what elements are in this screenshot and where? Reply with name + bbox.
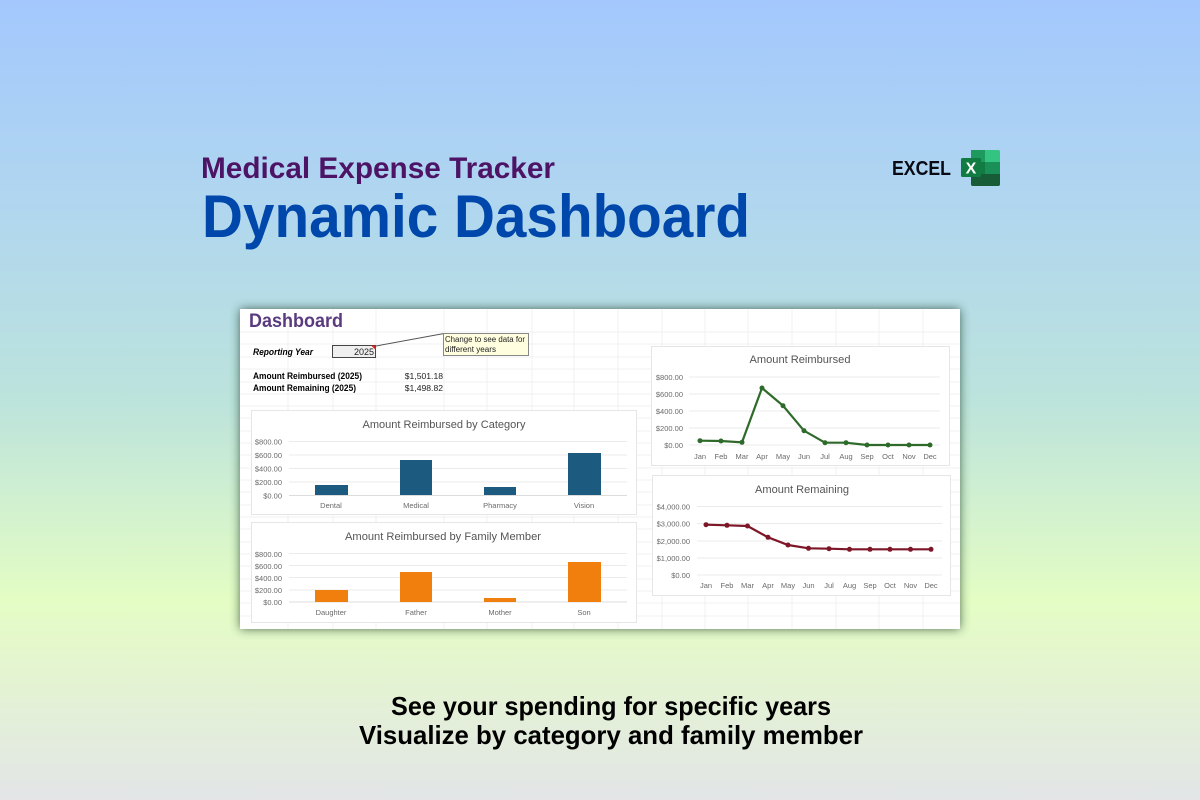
- line chart: amount reimbursed: [652, 346, 950, 466]
- bar chart: reimbursed by family member: Son: [577, 608, 591, 617]
- line chart: amount remaining: Nov: [904, 581, 917, 590]
- line chart: amount remaining: $1,000.00: [657, 554, 690, 563]
- line chart: amount remaining: Aug: [843, 581, 856, 590]
- input: reporting year cell: 2025: [354, 347, 374, 357]
- heading: Dashboard: Dashboard: [249, 311, 343, 332]
- line chart: amount remaining: Oct: [884, 581, 897, 590]
- callout: change year note: [376, 334, 528, 356]
- bar chart: reimbursed by family member: $0.00: [263, 598, 282, 607]
- callout: change year note: Change to see data for: [445, 335, 525, 344]
- line chart: amount reimbursed: Jul: [820, 452, 830, 461]
- bar chart: reimbursed by family member: $800.00: [255, 550, 282, 559]
- line chart: amount remaining: $4,000.00: [657, 502, 690, 512]
- bar chart: reimbursed by category: Medical: [403, 501, 429, 510]
- stat: amount remaining: [253, 383, 443, 393]
- line chart: amount remaining: May: [781, 581, 795, 590]
- subtitle: Medical Expense Tracker: Medical Expense Tracker: [201, 152, 555, 185]
- line chart: amount reimbursed: Jan: [694, 452, 706, 461]
- line chart: amount remaining: Sep: [863, 581, 877, 590]
- line chart: amount remaining: $0.00: [671, 571, 690, 580]
- bar chart: reimbursed by category: [252, 410, 636, 514]
- line chart: amount reimbursed: Dec: [923, 452, 937, 461]
- line chart: amount reimbursed: Amount Reimbursed: [750, 354, 850, 366]
- line chart: amount reimbursed: Apr: [756, 452, 768, 461]
- line chart: amount remaining: Mar: [741, 581, 754, 590]
- bar chart: reimbursed by category: Pharmacy: [483, 501, 517, 510]
- line chart: amount reimbursed: Jun: [798, 452, 810, 461]
- bar chart: reimbursed by family member: $400.00: [255, 574, 282, 583]
- icon: Excel logo: [961, 150, 1000, 186]
- bar chart: reimbursed by category: Vision: [574, 501, 594, 510]
- line chart: amount reimbursed: Feb: [715, 452, 727, 461]
- line chart: amount reimbursed: $400.00: [656, 407, 683, 416]
- line chart: amount reimbursed: Aug: [839, 452, 853, 461]
- line chart: amount reimbursed: Oct: [882, 452, 895, 461]
- bar chart: reimbursed by category: Dental: [320, 501, 342, 510]
- caption line 2: Visualize by category and family member: [359, 720, 863, 750]
- panel: spreadsheet dashboard: [240, 309, 960, 629]
- bar chart: reimbursed by family member: $200.00: [255, 586, 282, 595]
- stat: amount reimbursed: $1,501.18: [405, 371, 443, 381]
- icon: Excel logo: X: [966, 160, 977, 178]
- bar chart: reimbursed by category: $400.00: [255, 464, 282, 474]
- bar chart: reimbursed by family member: [252, 522, 636, 622]
- line chart: amount remaining: Apr: [762, 581, 774, 590]
- line chart: amount reimbursed: May: [776, 452, 790, 461]
- stat: amount reimbursed: [253, 371, 443, 381]
- line chart: amount remaining: Jun: [802, 581, 815, 590]
- line chart: amount reimbursed: Mar: [736, 452, 749, 461]
- line chart: amount remaining: $3,000.00: [657, 520, 690, 528]
- bar chart: reimbursed by category: $600.00: [255, 451, 282, 460]
- title: Dynamic Dashboard: Dynamic Dashboard: [202, 183, 750, 250]
- bar chart: reimbursed by family member: Mother: [488, 608, 512, 617]
- bar chart: reimbursed by category: $800.00: [255, 438, 282, 446]
- label: EXCEL: EXCEL: [892, 158, 951, 180]
- stat: amount remaining: Amount Remaining (2025): [253, 383, 356, 393]
- panel shadow: [240, 309, 960, 629]
- line chart: amount remaining: Jan: [700, 581, 712, 590]
- input: reporting year cell: [332, 346, 376, 358]
- line chart: amount remaining: [652, 476, 950, 596]
- line chart: amount reimbursed: Nov: [902, 452, 916, 461]
- stat: amount remaining: $1,498.82: [405, 383, 443, 393]
- line chart: amount remaining: Amount Remaining: [755, 484, 849, 496]
- bar chart: reimbursed by category: $0.00: [263, 492, 282, 500]
- bar chart: reimbursed by family member: Father: [405, 608, 427, 617]
- caption line 1: See your spending for specific years: [391, 691, 831, 721]
- bar chart: reimbursed by category: $200.00: [255, 478, 282, 487]
- line chart: amount remaining: Jul: [824, 581, 834, 590]
- stat: amount reimbursed: Amount Reimbursed (2025): [253, 371, 362, 381]
- label: Reporting Year: Reporting Year: [253, 347, 313, 357]
- line chart: amount reimbursed: $0.00: [664, 441, 683, 450]
- callout: change year note: different years: [445, 345, 496, 354]
- line chart: amount remaining: Feb: [721, 581, 733, 590]
- bar chart: reimbursed by family member: Daughter: [316, 608, 347, 617]
- bar chart: reimbursed by family member: Amount Reimbursed by Family Member: [345, 531, 541, 543]
- line chart: amount reimbursed: Sep: [860, 452, 874, 461]
- line chart: amount remaining: $2,000.00: [657, 537, 690, 546]
- line chart: amount remaining: Dec: [924, 581, 938, 590]
- bar chart: reimbursed by category: Amount Reimbursed by Category: [362, 419, 526, 431]
- line chart: amount reimbursed: $800.00: [656, 373, 683, 382]
- bar chart: reimbursed by family member: $600.00: [255, 562, 282, 571]
- line chart: amount reimbursed: $200.00: [656, 424, 683, 433]
- line chart: amount reimbursed: $600.00: [656, 390, 683, 399]
